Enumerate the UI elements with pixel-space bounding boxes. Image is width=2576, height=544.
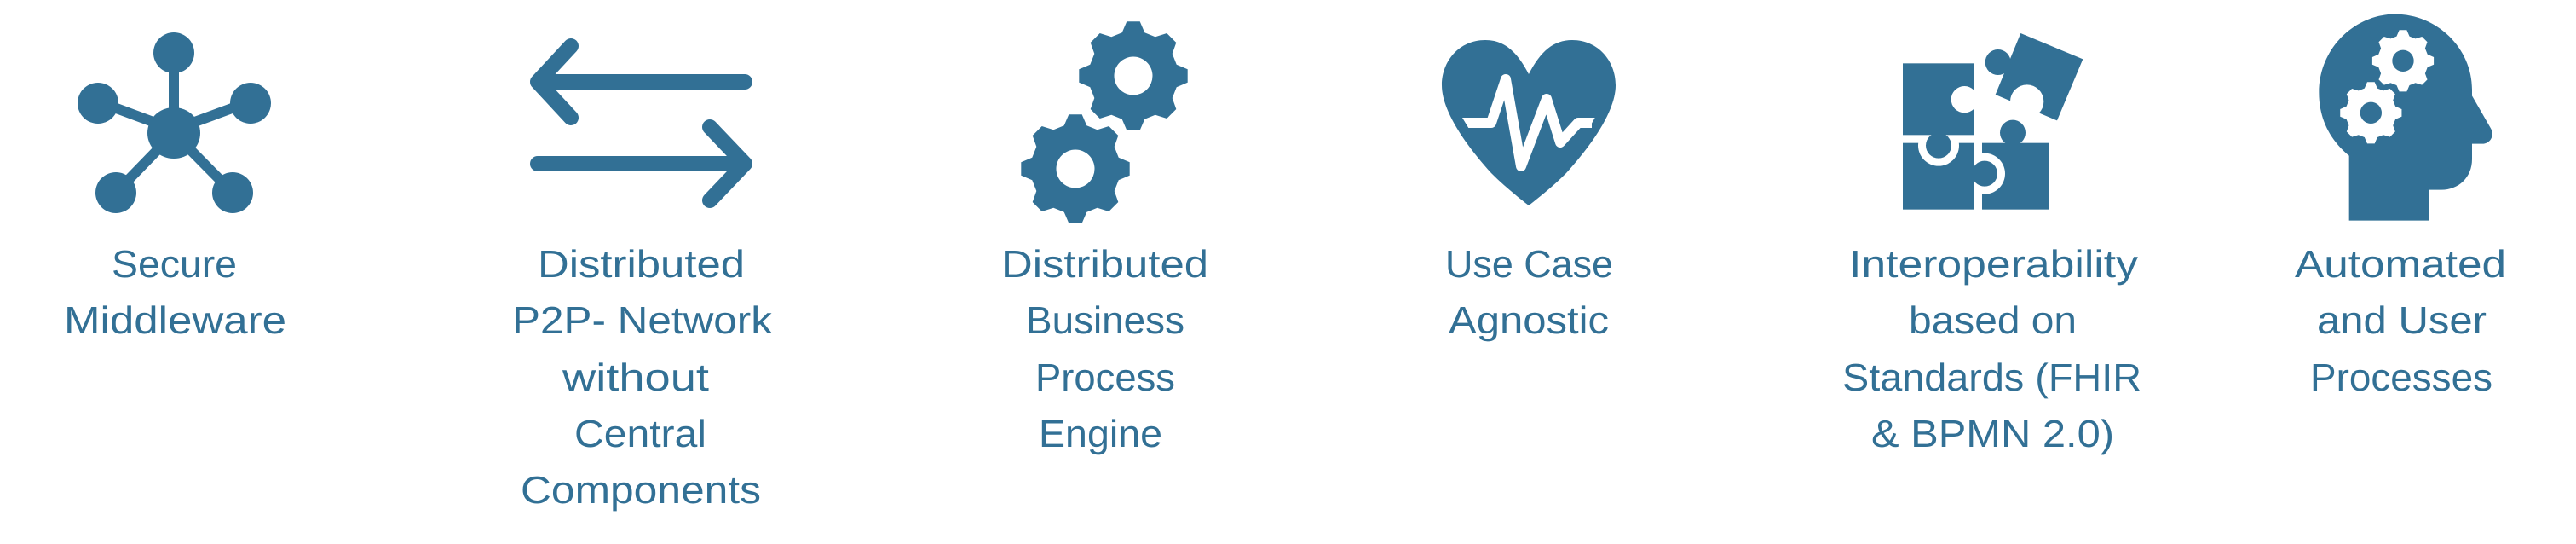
text: Secure Middleware: Secure <box>112 242 237 286</box>
text: Interoperability based on Standards (FHIR & BPMN 2.0): & BPMN 2.0) <box>1871 412 2114 455</box>
text: Distributed Business Process Engine: Engine <box>1039 412 1162 455</box>
text: Distributed Business Process Engine: Business <box>1026 298 1184 342</box>
panel: distributed business process engine <box>1001 21 1208 455</box>
text: Distributed Business Process Engine <box>1001 242 1208 455</box>
text: Secure Middleware <box>64 242 286 342</box>
icon: puzzle pieces <box>1903 33 2083 210</box>
icon: head with gears <box>2319 14 2492 221</box>
icon: network hub <box>78 32 271 213</box>
text: Interoperability based on Standards (FHIR & BPMN 2.0) <box>1842 242 2141 455</box>
text: Use Case Agnostic <box>1445 242 1613 342</box>
text: Automated and User Processes: Automated <box>2295 242 2506 286</box>
text: Use Case Agnostic: Agnostic <box>1449 298 1609 342</box>
panel: distributed P2P network <box>512 46 773 512</box>
panel: automated and user processes <box>2295 14 2506 399</box>
text: Distributed P2P- Network without Central Components: without <box>562 356 710 399</box>
text: Use Case Agnostic: Use Case <box>1445 242 1613 286</box>
icon: two gears <box>1021 21 1188 223</box>
text: Distributed P2P- Network without Central Components: Central <box>574 412 706 455</box>
text: Distributed P2P- Network without Central Components: P2P- Network <box>512 298 773 342</box>
text: Automated and User Processes <box>2295 242 2506 399</box>
text: Interoperability based on Standards (FHIR & BPMN 2.0): Interoperability <box>1849 242 2139 286</box>
text: Secure Middleware: Middleware <box>64 298 286 342</box>
panel: use case agnostic <box>1442 40 1616 342</box>
panel: secure middleware <box>64 32 286 342</box>
panel: interoperability <box>1842 33 2141 455</box>
icon: two-way arrows <box>538 46 745 200</box>
text: Distributed P2P- Network without Central Components: Distributed <box>538 242 745 286</box>
text: Distributed Business Process Engine: Process <box>1035 356 1175 399</box>
text: Interoperability based on Standards (FHIR & BPMN 2.0): based on <box>1909 298 2077 342</box>
icon: heart with pulse <box>1442 40 1616 205</box>
text: Distributed P2P- Network without Central Components: Components <box>521 468 761 512</box>
text: Automated and User Processes: and User <box>2317 298 2487 342</box>
text: Distributed P2P- Network without Central Components <box>512 242 773 512</box>
text: Interoperability based on Standards (FHIR & BPMN 2.0): Standards (FHIR <box>1842 356 2141 399</box>
text: Automated and User Processes: Processes <box>2310 356 2492 399</box>
text: Distributed Business Process Engine: Distributed <box>1001 242 1208 286</box>
